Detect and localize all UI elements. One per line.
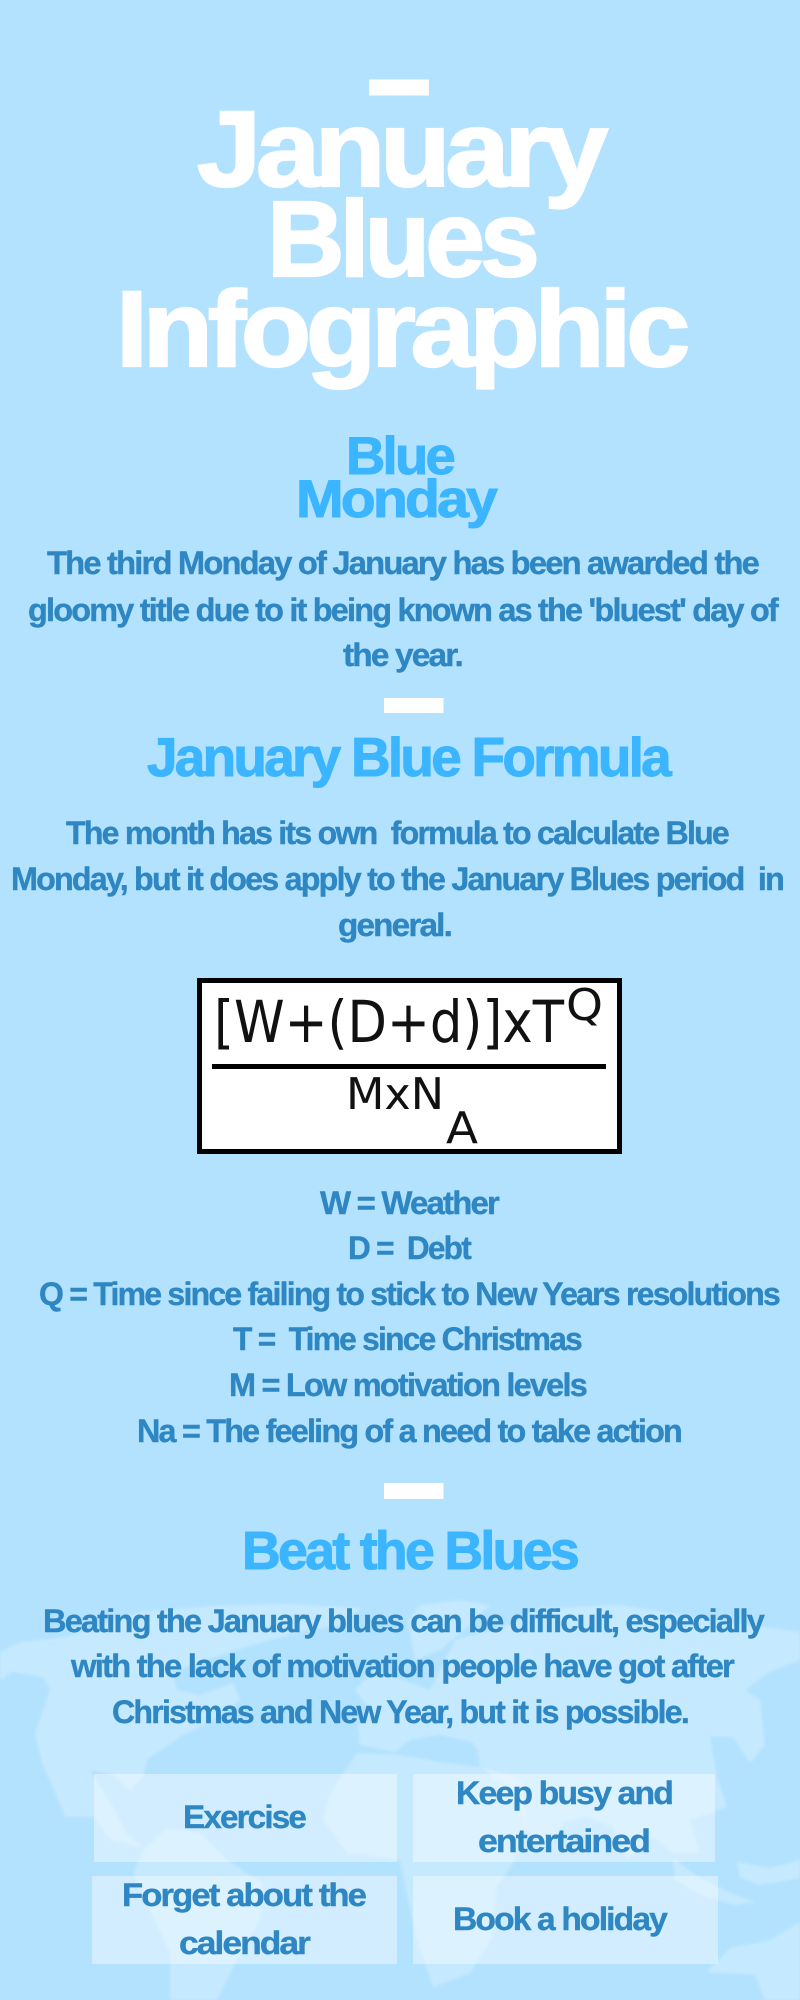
title: Blues [267,178,536,299]
title [116,88,687,389]
formula legend: M = Low motivation levels [229,1367,587,1403]
tip card: Exercise [94,1774,397,1862]
map: north america [0,1604,362,1847]
tip card: Book a holiday [413,1876,718,1964]
heading: Blue Monday [296,427,498,529]
text: formula introduction: general. [338,907,451,943]
tip card: Book a holiday: Book a holiday [453,1901,668,1937]
tip card: Forget about the calendar: Forget about the [122,1877,366,1913]
map: greenland [408,1600,490,1660]
heading: Blue Monday: Blue [346,427,454,486]
formula image box [200,980,620,1154]
formula subscript: A [446,1103,478,1154]
map: africa [323,1753,527,1987]
text: Blue Monday description: The third Monday of January has been awarded the [47,545,759,581]
heading: Beat the Blues: Beat the Blues [242,1521,578,1581]
formula legend: W = Weather [320,1185,499,1221]
text: Blue Monday description: gloomy title due to it being known as the 'bluest' day of [28,592,779,628]
tip card: Forget about the calendar [92,1876,397,1964]
formula fraction bar [212,1064,606,1069]
map: south america [133,1828,263,2000]
tip card: Exercise: Exercise [183,1799,306,1835]
formula legend: Q = Time since failing to stick to New Years resolutions [39,1276,780,1312]
heading: January Blue Formula: January Blue Formula [147,726,672,788]
text: formula introduction [11,815,783,943]
formula legend: D = Debt [348,1230,472,1266]
map: eurasia [355,1605,800,1860]
text: Blue Monday description: the year. [343,637,462,673]
heading: Blue Monday: Monday [296,470,498,529]
map: australia [707,1922,800,2000]
divider bar [384,1483,444,1499]
text: Beat the Blues description: Christmas and New Year, but it is possible. [112,1694,688,1730]
title: Infographic [116,268,687,389]
divider bar [384,698,444,713]
formula legend: Na = The feeling of a need to take action [137,1413,681,1449]
text: formula introduction: Monday, but it does apply to the January Blues period in [11,861,783,897]
tip card: Keep busy and entertained: Keep busy and [456,1775,672,1811]
text: Beat the Blues description [43,1603,765,1730]
text: formula introduction: The month has its own formula to calculate Blue [66,815,729,851]
world map background [0,1600,800,2000]
formula denominator: MxN [346,1069,444,1120]
formula exponent: Q [566,980,603,1031]
tip card: Keep busy and entertained: entertained [478,1823,649,1859]
tip card: Keep busy and entertained [413,1774,715,1862]
text: Blue Monday description [28,545,779,673]
tip card: Forget about the calendar: calendar [179,1925,310,1961]
top divider bar [369,80,429,96]
formula legend: T = Time since Christmas [233,1321,582,1357]
title: January [197,88,608,209]
formula numerator: [W+(D+d)]xT [214,988,564,1056]
map: indonesia islands [673,1858,800,1905]
text: Beat the Blues description: Beating the January blues can be difficult, especially [43,1603,765,1639]
text: Beat the Blues description: with the lack of motivation people have got after [70,1648,734,1684]
formula legend [39,1185,780,1449]
